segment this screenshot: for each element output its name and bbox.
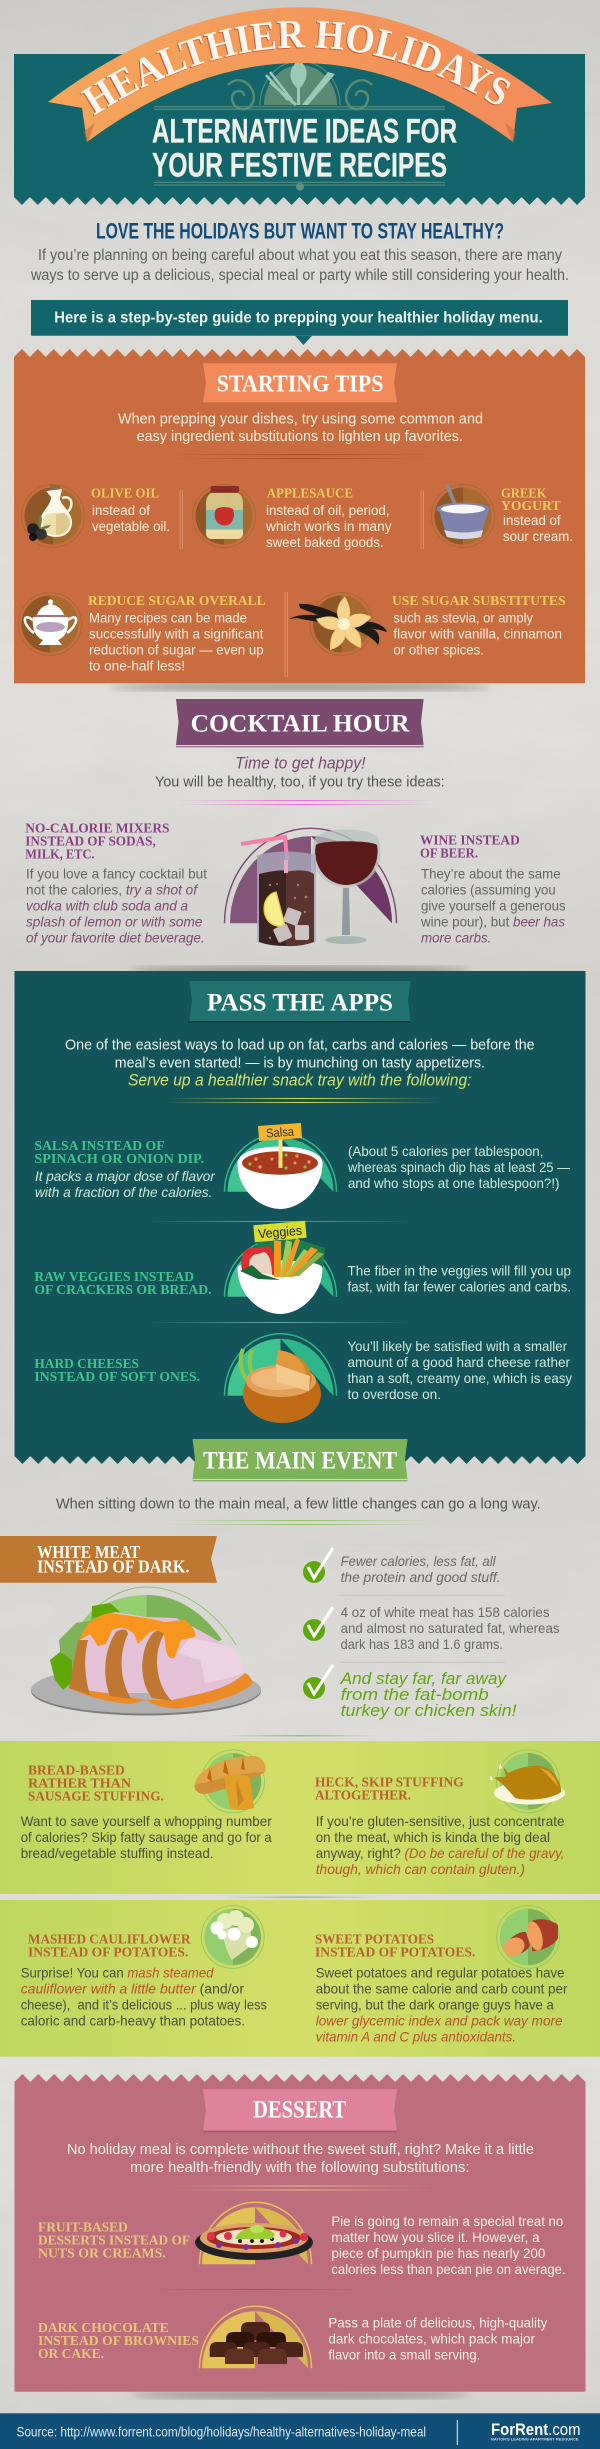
sweet potatoes text: SWEET POTATOES — [315, 1932, 434, 1947]
greek yogurt text: sour cream. — [503, 528, 573, 544]
pie detail text: piece of pumpkin pie has nearly 200 — [331, 2245, 545, 2261]
heading: cocktail hour — [176, 699, 424, 747]
chocolate detail text — [328, 2314, 547, 2362]
mashed cauliflower text: Surprise! You can mash steamed — [21, 1965, 215, 1981]
icon: sweet potatoes — [497, 1906, 559, 1968]
panel: stuffing tips — [0, 1741, 600, 1894]
intro text — [30, 247, 569, 284]
icon: turkey breast on plate — [31, 1587, 261, 1716]
sweet potatoes text: Sweet potatoes and regular potatoes have — [316, 1965, 565, 1981]
hard cheeses text — [34, 1357, 200, 1385]
icon: olive oil — [22, 484, 84, 548]
skip stuffing text: though, which can contain gluten.) — [316, 1861, 525, 1877]
greek yogurt text: GREEK — [501, 486, 547, 501]
sugar substitutes text — [392, 594, 566, 658]
check item three: turkey or chicken skin! — [341, 1701, 517, 1720]
veggies detail text: fast, with far fewer calories and carbs. — [348, 1279, 571, 1295]
hard cheese detail text: than a soft, creamy one, which is easy — [348, 1370, 572, 1386]
icon: fruit pie — [195, 2202, 313, 2264]
icon: applesauce — [192, 484, 256, 548]
no-calorie mixers text: INSTEAD OF SODAS, — [25, 834, 156, 849]
bread stuffing text: BREAD-BASED — [28, 1763, 125, 1778]
veggies detail text: The fiber in the veggies will fill you up — [348, 1263, 571, 1279]
dark chocolate heading: DARK CHOCOLATE — [38, 2321, 169, 2336]
mashed cauliflower text: MASHED CAULIFLOWER — [28, 1932, 191, 1947]
salsa text: with a fraction of the calories. — [35, 1184, 212, 1200]
sweet potatoes text: about the same calorie and carb count per — [316, 1981, 568, 1997]
pie detail text: matter how you slice it. However, a — [331, 2229, 540, 2245]
panel: dessert — [14, 2074, 586, 2392]
main event intro: When sitting down to the main meal, a few little changes can go a long way. — [56, 1495, 541, 1512]
reduce sugar text: Many recipes can be made — [89, 610, 247, 626]
heading: dessert: DESSERT — [253, 2096, 347, 2123]
pie detail text — [331, 2213, 566, 2277]
heading: starting tips — [203, 363, 397, 402]
panel: side dish tips — [0, 1900, 600, 2057]
sugar substitutes text: or other spices. — [393, 642, 484, 658]
no-calorie mixers text: splash of lemon or with some — [26, 914, 203, 930]
logo: ForRent.com: NATION'S LEADING APARTMENT RESOURCE — [491, 2436, 579, 2442]
mashed cauliflower text: cheese), and it’s delicious ... plus way less — [21, 1997, 267, 2013]
chocolate detail text: Pass a plate of delicious, high-quality — [328, 2314, 547, 2330]
check item two: dark has 183 and 1.6 grams. — [341, 1636, 503, 1652]
hard cheese detail text: You’ll likely be satisfied with a smaller — [348, 1338, 567, 1354]
mashed cauliflower text: cauliflower with a little butter (and/or — [21, 1981, 244, 1997]
icon: soda glass and wine glass — [224, 828, 396, 946]
reduce sugar text: REDUCE SUGAR OVERALL — [88, 594, 266, 609]
icon: salsa bowl: Salsa — [266, 1125, 295, 1140]
chocolate detail text: flavor into a small serving. — [328, 2346, 480, 2362]
salsa text: SPINACH OR ONION DIP. — [34, 1152, 204, 1167]
icon: sugar bowl — [18, 592, 82, 656]
fruit-based desserts heading: DESSERTS INSTEAD OF — [38, 2234, 190, 2249]
no-calorie mixers text: NO-CALORIE MIXERS — [25, 821, 170, 836]
dessert intro: more health-friendly with the following substitutions: — [130, 2159, 470, 2176]
hard cheese detail text — [348, 1338, 572, 1402]
wine instead of beer text — [420, 833, 566, 946]
chocolate detail text: dark chocolates, which pack major — [328, 2330, 535, 2346]
section: cocktail hour — [25, 699, 566, 946]
panel shadow — [130, 2391, 470, 2399]
salsa detail text: (About 5 calories per tablespoon, — [348, 1143, 543, 1159]
hard cheese detail text: to overdose on. — [348, 1386, 441, 1402]
intro text: ways to serve up a delicious, special meal or party while still considering your health. — [30, 267, 569, 284]
heading: pass the apps: PASS THE APPS — [207, 990, 393, 1017]
sugar substitutes text: such as stevia, or amply — [393, 610, 533, 626]
raw veggies text: OF CRACKERS OR BREAD. — [34, 1283, 212, 1298]
dessert intro — [67, 2141, 534, 2176]
panel shadow — [130, 966, 470, 974]
section: the main event — [0, 1439, 560, 1720]
ribbon: white meat instead of dark: INSTEAD OF DARK. — [37, 1557, 189, 1577]
sweet potatoes text: serving, but the dark orange guys have a — [316, 1997, 554, 2013]
cocktail hour intro — [155, 753, 445, 791]
dark chocolate heading: OR CAKE. — [38, 2347, 104, 2362]
bread stuffing text: of calories? Skip fatty sausage and go for a — [21, 1829, 272, 1845]
cocktail hour intro: Time to get happy! — [235, 753, 366, 772]
check item two — [341, 1604, 560, 1652]
skip stuffing text: anyway, right? (Do be careful of the gravy, — [316, 1845, 564, 1861]
olive oil text: vegetable oil. — [92, 518, 170, 534]
mashed cauliflower text — [21, 1932, 267, 2029]
dark chocolate heading: INSTEAD OF BROWNIES — [38, 2334, 199, 2349]
icon: veggie bowl — [224, 1221, 336, 1314]
icon: chocolates — [200, 2306, 312, 2368]
raw veggies text — [34, 1270, 212, 1298]
dessert intro: No holiday meal is complete without the sweet stuff, right? Make it a little — [67, 2141, 534, 2158]
fruit-based desserts heading: FRUIT-BASED — [38, 2221, 128, 2236]
pass the apps intro: meal’s even started! — is by munching on tasty appetizers. — [115, 1054, 485, 1071]
skip stuffing text: If you’re gluten-sensitive, just concentrate — [316, 1813, 565, 1829]
heading: pass the apps — [188, 981, 411, 1022]
sweet potatoes text — [315, 1932, 568, 2045]
no-calorie mixers text: If you love a fancy cocktail but — [26, 866, 207, 882]
guide callout box: Here is a step-by-step guide to prepping your healthier holiday menu. — [54, 310, 543, 327]
pass the apps intro — [65, 1036, 535, 1090]
icon: bread — [194, 1750, 266, 1813]
reduce sugar text: reduction of sugar — even up — [89, 642, 264, 658]
mashed cauliflower text: INSTEAD OF POTATOES. — [28, 1945, 188, 1960]
icon: check mark — [303, 1665, 333, 1699]
wine instead of beer text: give yourself a generous — [421, 898, 566, 914]
hard cheeses text: INSTEAD OF SOFT ONES. — [34, 1370, 200, 1385]
pie detail text: Pie is going to remain a special treat no — [331, 2213, 563, 2229]
hard cheeses text: HARD CHEESES — [34, 1357, 139, 1372]
applesauce text: APPLESAUCE — [267, 486, 353, 501]
check item two: 4 oz of white meat has 158 calories — [341, 1604, 550, 1620]
dark chocolate heading — [38, 2321, 199, 2362]
subtitle — [152, 112, 457, 185]
wine instead of beer text: more carbs. — [421, 930, 491, 946]
pie detail text: calories less than pecan pie on average. — [331, 2261, 566, 2277]
check item one — [341, 1553, 501, 1585]
salsa text: SALSA INSTEAD OF — [34, 1139, 165, 1154]
heading: cocktail hour: COCKTAIL HOUR — [191, 711, 410, 738]
cocktail hour intro: You will be healthy, too, if you try these ideas: — [155, 774, 445, 791]
salsa detail text: whereas spinach dip has at least 25 — — [347, 1159, 570, 1175]
icon: veggie bowl: Veggies — [257, 1223, 303, 1241]
check item two: and almost no saturated fat, whereas — [341, 1620, 560, 1636]
starting tips intro text: easy ingredient substitutions to lighten up favorites. — [137, 428, 463, 445]
salsa text: It packs a major dose of flavor — [35, 1168, 216, 1184]
check item three — [340, 1669, 517, 1720]
no-calorie mixers text: not the calories, try a shot of — [26, 882, 199, 898]
heading: the main event: THE MAIN EVENT — [203, 1447, 397, 1474]
olive oil text — [91, 486, 170, 534]
icon: check mark — [303, 1607, 333, 1641]
fruit-based desserts heading — [38, 2221, 190, 2262]
applesauce text: sweet baked goods. — [266, 534, 384, 550]
bread stuffing text: bread/vegetable stuffing instead. — [21, 1845, 214, 1861]
wine instead of beer text: OF BEER. — [420, 846, 478, 861]
skip stuffing text: ALTOGETHER. — [315, 1788, 411, 1803]
sugar substitutes text: flavor with vanilla, cinnamon — [393, 626, 562, 642]
ribbon: white meat instead of dark: WHITE MEAT — [37, 1542, 140, 1562]
salsa text — [34, 1139, 216, 1200]
sweet potatoes text: lower glycemic index and pack way more — [316, 2013, 563, 2029]
hard cheese detail text: amount of a good hard cheese rather — [348, 1354, 570, 1370]
icon: roast turkey — [490, 1750, 565, 1813]
icon: cauliflower — [201, 1906, 264, 1968]
reduce sugar text — [88, 594, 266, 674]
header rules — [154, 107, 445, 185]
sweet potatoes text: INSTEAD OF POTATOES. — [315, 1945, 475, 1960]
icon: emblem with fork, spoon and knife — [228, 60, 372, 109]
icon: cheese — [224, 1334, 336, 1423]
skip stuffing text — [315, 1775, 565, 1877]
header panel — [14, 54, 585, 205]
bread stuffing text: RATHER THAN — [28, 1776, 131, 1791]
wine instead of beer text: calories (assuming you — [421, 882, 556, 898]
skip stuffing text: HECK, SKIP STUFFING — [315, 1775, 464, 1790]
applesauce text: which works in many — [265, 518, 392, 534]
icon: salsa bowl — [224, 1123, 336, 1209]
no-calorie mixers text: vodka with club soda and a — [26, 898, 188, 914]
sweet potatoes text: vitamin A and C plus antioxidants. — [316, 2029, 516, 2045]
logo: ForRent.com: ForRent.com — [491, 2420, 580, 2439]
wine instead of beer text: They’re about the same — [421, 866, 561, 882]
wine instead of beer text: wine pour), but beer has — [420, 914, 565, 930]
olive oil text: instead of — [92, 502, 150, 518]
starting tips intro text: When prepping your dishes, try using some common and — [118, 410, 483, 427]
heading: dessert — [203, 2089, 397, 2132]
raw veggies text: RAW VEGGIES INSTEAD — [34, 1270, 194, 1285]
bread stuffing text — [21, 1763, 272, 1861]
olive oil text: OLIVE OIL — [91, 486, 159, 501]
bread stuffing text: SAUSAGE STUFFING. — [28, 1789, 164, 1804]
intro text: If you’re planning on being careful about what you eat this season, there are many — [38, 247, 562, 264]
greek yogurt text — [501, 486, 573, 544]
heading: starting tips: STARTING TIPS — [217, 372, 384, 398]
icon: vanilla flower — [289, 592, 387, 656]
divider between green panels — [222, 1896, 379, 1898]
checklist — [303, 1545, 560, 1720]
greek yogurt text: YOGURT — [501, 499, 561, 514]
no-calorie mixers text — [25, 821, 207, 946]
subtitle: YOUR FESTIVE RECIPES — [152, 147, 447, 185]
mashed cauliflower text: caloric and carb-heavy than potatoes. — [21, 2013, 245, 2029]
sugar substitutes text: USE SUGAR SUBSTITUTES — [392, 594, 566, 609]
panel: pass the apps — [14, 971, 586, 1464]
no-calorie mixers text: MILK, ETC. — [25, 847, 94, 862]
guide callout box — [31, 300, 568, 345]
check item one: the protein and good stuff. — [341, 1569, 501, 1585]
salsa detail text: and who stops at one tablespoon?!) — [348, 1175, 560, 1191]
reduce sugar text: to one-half less! — [89, 658, 185, 674]
wine instead of beer text: WINE INSTEAD — [420, 833, 520, 848]
panel shadow — [110, 683, 490, 691]
applesauce text — [265, 486, 392, 550]
check item three: And stay far, far away — [340, 1669, 508, 1688]
no-calorie mixers text: of your favorite diet beverage. — [26, 930, 205, 946]
reduce sugar text: successfully with a significant — [89, 626, 263, 642]
salsa detail text — [347, 1143, 570, 1191]
heading: the main event — [192, 1439, 408, 1481]
check item three: from the fat-bomb — [341, 1685, 489, 1704]
ribbon: white meat instead of dark — [0, 1536, 217, 1583]
icon: check mark — [303, 1548, 333, 1583]
applesauce text: instead of oil, period, — [266, 502, 390, 518]
pass the apps intro: One of the easiest ways to load up on fat, carbs and calories — before the — [65, 1036, 535, 1053]
bread stuffing text: Want to save yourself a whopping number — [21, 1813, 272, 1829]
panel: starting tips — [14, 349, 585, 683]
footer — [0, 2413, 600, 2449]
check item one: Fewer calories, less fat, all — [341, 1553, 496, 1569]
title ribbon: HEALTHIER HOLIDAYS — [80, 20, 511, 116]
greek yogurt text: instead of — [503, 512, 561, 528]
skip stuffing text: on the meat, which is kinda the big deal — [316, 1829, 550, 1845]
subtitle: ALTERNATIVE IDEAS FOR — [152, 112, 457, 150]
starting tips intro text — [118, 410, 483, 445]
icon: greek yogurt — [432, 484, 494, 548]
pass the apps intro: Serve up a healthier snack tray with the following: — [128, 1072, 472, 1090]
source text: Source: http://www.forrent.com/blog/holidays/healthy-alternatives-holiday-meal — [16, 2425, 426, 2440]
veggies detail text — [348, 1263, 571, 1295]
fruit-based desserts heading: NUTS OR CREAMS. — [38, 2247, 166, 2262]
